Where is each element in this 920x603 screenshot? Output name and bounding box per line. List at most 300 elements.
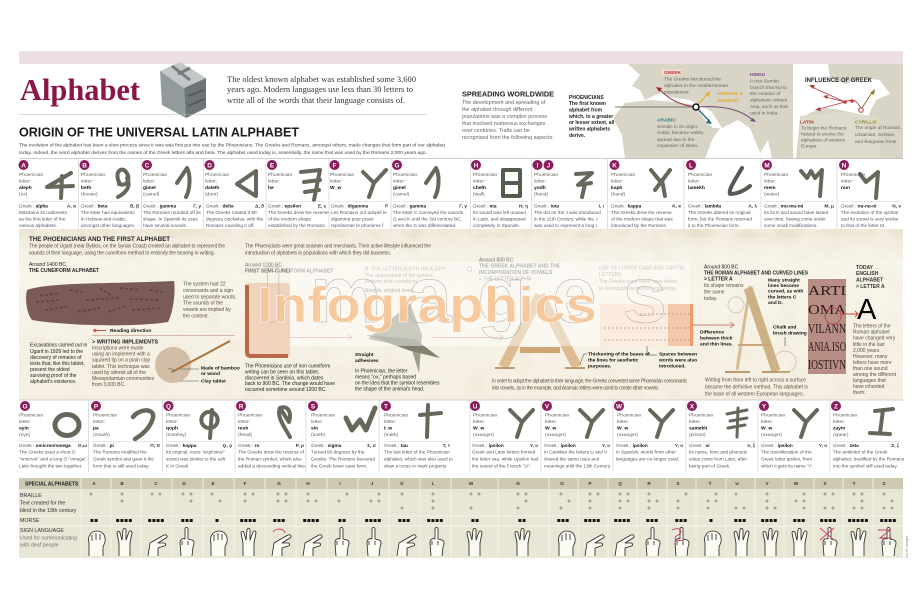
arrows: greek influence <box>809 85 875 112</box>
column letters: Q <box>618 481 622 486</box>
cell: T <box>379 400 453 472</box>
icon: samekh glyph <box>727 408 747 437</box>
text: semi-cuneiform: discovered in Sardinia, which dates <box>245 376 324 382</box>
text: writing implements <box>92 340 158 388</box>
cell: U: Υ, υ <box>530 443 538 449</box>
section: semi-cuneiform alphabet <box>245 262 446 294</box>
intro left: sounds of their language, using the cuneiform method to embody the bearing in writing. <box>29 250 215 256</box>
heading: THE PHOENICIANS AND THE FIRST ALPHABET <box>29 236 170 243</box>
cell: P <box>88 400 160 472</box>
text: sin: Phoenician <box>311 412 335 418</box>
badge C: C <box>145 162 150 169</box>
text: samekh: Phoenician <box>689 412 713 418</box>
cell: X: value come from Latin, after <box>689 456 748 462</box>
callout: spaces: introduced. <box>659 364 686 370</box>
cell: T: Greek : tau <box>384 443 408 448</box>
cell: E: of the modern shape <box>268 216 311 222</box>
cell: C <box>142 159 201 229</box>
text: aleph note: means "ox," perhaps based <box>355 374 416 380</box>
cell: P: Greek symbol and gave it the <box>93 456 154 462</box>
badge K: K <box>612 162 617 169</box>
header band <box>19 51 903 64</box>
cell: X: Greek : xi <box>689 443 710 448</box>
cell: X: being part of Greek. <box>689 464 730 468</box>
icon: ayin glyph <box>55 414 79 436</box>
badge R: R <box>239 403 244 410</box>
column letters: H <box>306 481 310 486</box>
section: roman alphabet heading: > LETTER A <box>704 276 733 282</box>
image: roman inscription: OMA <box>808 302 846 317</box>
cell: E: Ε, ε <box>318 204 327 210</box>
text: gimel: gimel <box>393 185 406 191</box>
cell: L: The Greeks altered its original <box>688 210 751 215</box>
label: greek <box>662 69 728 96</box>
badge T: T <box>384 403 388 410</box>
cell: Z <box>830 400 905 472</box>
text: samekh: samekh <box>689 426 707 432</box>
cell: S: Greek : sigma <box>311 443 341 448</box>
text: waw: letter: <box>761 419 773 425</box>
callout: thick and thin: and thin lines. <box>700 342 734 348</box>
label: cyrillic <box>855 120 902 145</box>
image: roman inscription <box>808 279 847 374</box>
text: kaph: letter: <box>611 178 623 184</box>
cell: E <box>266 159 329 229</box>
cell: U: Greek : ipsilon <box>472 443 504 448</box>
section: semi-cuneiform alphabet: Simple, angled lines. <box>365 288 415 294</box>
icon: roman letter A <box>725 286 796 373</box>
icon: nun glyph <box>860 172 878 198</box>
cell: D <box>204 159 264 229</box>
icon: gimel glyph <box>177 168 190 197</box>
text: semi-cuneiform: writing can be seen on this tablet, <box>245 370 319 376</box>
section: today english alphabet: have inherited <box>853 384 885 390</box>
row labels: Used for communicating <box>20 536 77 542</box>
badge B: B <box>82 162 87 169</box>
panel: spreading worldwide <box>462 90 554 141</box>
intro text: years ago. Modern languages use less than 30 letters to <box>227 85 413 94</box>
panel: phoenicians note: or lesser extent, all <box>569 120 615 126</box>
text: he: Phoenician <box>268 172 292 178</box>
arrow: progression three <box>620 322 734 328</box>
section: today english alphabet: ALPHABET <box>856 278 883 284</box>
text: daleth: (door) <box>205 192 218 198</box>
icon: kaph glyph <box>651 170 670 196</box>
cell: H: completely in Spanish. <box>473 223 520 228</box>
badge D: D <box>207 162 212 169</box>
text: qoph: qoph <box>166 426 178 432</box>
cell: P: The Romans modified the <box>93 450 147 454</box>
cell: S: Greeks. The Romans favoured <box>311 456 375 462</box>
cell: K: introduced by the Romans. <box>611 223 667 228</box>
text: waw: letter: <box>545 419 557 425</box>
text: writing implements: > WRITING IMPLEMENTS <box>92 340 158 346</box>
label: greek: alphabet to the mediterranean <box>664 83 728 89</box>
text: mem: mem <box>764 186 776 191</box>
label: arabic: ARABIC <box>657 118 676 124</box>
badge H: H <box>474 162 479 169</box>
icon: metal type cube <box>160 62 206 118</box>
section: semi-cuneiform alphabet: B. THE LETTER ALEPH OR ALEPH <box>365 266 446 272</box>
column letters: W <box>794 481 799 486</box>
cell: N: Greek : nu-nu-ni <box>841 204 876 208</box>
callout: thick and thin: between thick <box>700 336 733 342</box>
text: qoph: letter: <box>166 419 178 425</box>
cell: K: The Greeks drew the reverse <box>611 210 672 215</box>
cell: O: The Greeks used a short O <box>19 450 76 454</box>
icon: waw glyph <box>510 410 533 437</box>
cell: Y: which it gets its name 'Y'. <box>761 464 813 468</box>
row labels: SPECIAL ALPHABETS <box>25 482 79 488</box>
cell: N: to that of the letter M. <box>841 223 885 228</box>
text: excavations: Excavations carried out in <box>30 342 87 348</box>
text: beth: (house) <box>81 192 98 198</box>
label: cyrillic: and Bulgarian fonts. <box>855 139 898 145</box>
section: today english alphabet: than one sound <box>853 366 888 372</box>
text: gimel: (camel) <box>143 192 160 198</box>
text: ayin: (eye) <box>19 432 31 438</box>
callout: curved lines: lines become <box>768 283 799 289</box>
row labels: with deaf people <box>20 542 59 548</box>
cell: V: shared the same uses and <box>544 456 600 462</box>
text: excavations: present the oldest <box>30 367 70 373</box>
text: excavations: discovery of remains of <box>30 355 82 361</box>
badge N: N <box>842 162 847 169</box>
section: today english alphabet <box>853 265 897 396</box>
column letters: F <box>244 481 247 486</box>
badge V: V <box>545 403 550 410</box>
label: latin: To begin the Romans <box>801 126 847 132</box>
text: ayin: Phoenician <box>19 412 43 418</box>
text: waw: W_w <box>617 426 628 432</box>
text: ayin: letter: <box>19 419 31 425</box>
text: aleph: (ox) <box>19 192 28 198</box>
cell: R <box>235 400 306 472</box>
cell: L <box>684 159 757 229</box>
cell: V <box>541 400 611 472</box>
text: yodh: (hand) <box>534 192 549 198</box>
text: pe: Phoenician <box>93 412 117 418</box>
icon: zayin glyph <box>870 409 893 434</box>
label: latin: helped to evolve the <box>801 132 844 138</box>
text: resh: (head) <box>238 432 253 438</box>
section: today english alphabet: ENGLISH <box>856 271 879 277</box>
cell: D: Δ, δ <box>255 204 264 210</box>
column letters: J <box>371 481 374 486</box>
column letters: S <box>676 481 680 486</box>
cell: K: of the modern shape that was <box>611 216 673 222</box>
text: zayin: letter: <box>833 419 845 425</box>
sign motion marks <box>273 528 892 541</box>
section: greek alphabet heading: > THE LETTER ALPHA <box>479 276 532 282</box>
cell: Q: Its original, more "explosive" <box>166 450 225 454</box>
badge Q: Q <box>166 403 171 410</box>
panel: phoenicians note: PHOENICIANS <box>569 95 604 101</box>
section: greek alphabet heading: INCORPORATION OF VOWELS <box>479 270 553 276</box>
icon: sin glyph <box>346 408 375 430</box>
section: lower case heading: LETTERS <box>599 272 622 278</box>
text: pe: (mouth) <box>93 432 110 438</box>
intro text: write all of the words that their language consists of. <box>227 96 405 105</box>
badge F: F <box>333 162 337 169</box>
image: cuneiform tablet <box>26 281 175 325</box>
cell: I J: was used to represent a long I. <box>534 223 598 228</box>
text: beth: Phoenician <box>81 172 105 178</box>
text: samekh: letter: <box>689 419 701 425</box>
section: roman alphabet heading <box>704 264 809 302</box>
section: today english alphabet: have changed very <box>853 336 896 342</box>
cell: C: shape. In Spanish its uses <box>143 216 198 222</box>
text: qoph: (monkey) <box>166 432 187 438</box>
badge U: U <box>473 403 478 410</box>
callout: thickening: Thickening of the bases of <box>588 352 650 358</box>
cell: K: Κ, κ <box>672 204 681 210</box>
cell: Z: into the symbol still used today. <box>833 464 898 468</box>
text: aleph: letter: <box>19 178 31 184</box>
section: semi-cuneiform alphabet: evolved from cuneiform. <box>365 279 418 285</box>
icon: clay tablet and stylus <box>155 341 230 383</box>
panel: phoenicians note: written alphabets <box>568 126 610 132</box>
text: taw: (mark) <box>384 432 398 438</box>
cell: D: Greek : delta <box>206 204 234 208</box>
heading: origin of the universal latin alphabet: ORIGIN OF THE UNIVERSAL LATIN ALPHABET <box>19 124 299 140</box>
callout: chalk and brush: brush drawing <box>773 330 807 336</box>
section: today english alphabet: TODAY <box>856 265 874 271</box>
arrow: to english A <box>842 311 858 317</box>
credit: Sol 90 Images <box>905 535 909 558</box>
icon: waw glyph <box>650 410 673 437</box>
column letters: G <box>277 481 281 486</box>
text: he: he <box>268 185 274 191</box>
section: greek alphabet heading <box>468 258 561 282</box>
column letters: D <box>182 481 186 486</box>
cell: W: In Spanish, words from other <box>616 450 676 454</box>
text: waw: Phoenician <box>617 412 641 418</box>
label: cyrillic: The origin of Russian, <box>855 125 902 131</box>
cell: U <box>470 400 539 472</box>
text: writing implements: used by almost all of the <box>92 370 146 376</box>
section: semi-cuneiform alphabet: The appearance of the symbol <box>365 273 433 279</box>
label: hindu <box>750 72 789 116</box>
badge L: L <box>689 162 693 169</box>
callout: chalk and brush <box>773 324 807 346</box>
cell: D: The Greeks rotated it 90 <box>206 210 257 215</box>
text: system note: The system had 22 <box>183 282 226 288</box>
cuneiform heading: Around 1400 BC, <box>29 262 67 268</box>
text: excavations: texts that, like this tablet, <box>30 361 85 367</box>
label: latin: alphabets of western <box>801 138 846 144</box>
text: writing implements: Inscriptions were made <box>92 346 144 352</box>
text: excavations: surviving proof of the <box>30 373 77 379</box>
panel: phoenicians and the first alphabet background <box>19 229 903 400</box>
text: waw: letter: <box>617 419 629 425</box>
text: aleph note: In Phoenician, the letter <box>355 368 408 374</box>
cell: E: Greek : epsilon <box>268 204 301 208</box>
section: roman alphabet heading: Around 800 BC <box>704 264 739 270</box>
cell: I J <box>532 159 605 229</box>
cell: H <box>470 159 528 229</box>
label: hindu: Asia, such as that <box>750 104 789 110</box>
text: sin: letter: <box>311 419 323 425</box>
badge E: E <box>270 162 275 169</box>
column letters: N <box>516 481 520 486</box>
cell: T: draw a cross or mark property. <box>384 464 447 468</box>
cell: W: Υ, υ <box>675 443 683 449</box>
text: waw: letter: <box>330 178 342 184</box>
text: waw: letter: <box>473 419 485 425</box>
cell: L: Greek : lambda <box>688 204 721 208</box>
intro right: The Phoenicians were great seamen and merchants. Their active lifestyle influenced the <box>245 244 431 250</box>
label: hebrew and aramaic: HEBREW & <box>717 91 744 97</box>
text: cheth: letter: <box>473 178 485 184</box>
text: writing implements: squared tip on a plain clay <box>92 358 151 364</box>
text: gimel: letter: <box>143 178 155 184</box>
label: latin: Europe. <box>801 144 818 150</box>
section: greek alphabet heading: THE GREEK ALPHABET AND THE <box>479 264 561 270</box>
panel: spreading worldwide: that involved numerous exchanges <box>462 121 546 127</box>
cell: Y <box>758 400 827 472</box>
arrow: reading direction <box>93 328 151 334</box>
text: sin: (tooth) <box>311 432 326 438</box>
cell: G: G and K until the 3rd century BC, <box>393 216 462 222</box>
cell: K <box>608 159 681 229</box>
text: roman note: the base of all western European languages. <box>705 392 804 398</box>
section: lower case heading: USE OF LOWER CASE AND CAPITAL <box>599 266 686 272</box>
badge J: J <box>547 162 551 169</box>
callout: curved lines: the letters C <box>768 294 797 300</box>
text: waw: (oxanger) <box>617 432 638 438</box>
column letters: E <box>211 481 215 486</box>
section: today english alphabet: languages that <box>853 378 886 384</box>
cell: P: form that is still used today. <box>93 464 149 468</box>
cell: B: The letter has equivalents <box>81 210 135 215</box>
icon: he glyph <box>301 170 320 200</box>
cell: P: Greek : pi <box>93 443 114 448</box>
icon: cheth glyph <box>503 170 520 196</box>
callout: spaces: Spaces between <box>659 352 697 358</box>
text: kaph: kaph <box>611 185 622 191</box>
cell: B: in Hebrew and Arabic, <box>81 216 127 222</box>
column letters: C <box>154 481 158 486</box>
cell: Z: alphabet, modified by the Romans <box>833 456 905 462</box>
cell: W: Greek : ipsilon <box>616 443 648 448</box>
label: hindu: HINDU <box>750 72 766 78</box>
labels: stylus and tablet: Clay tablet <box>201 378 226 384</box>
cell: N: and its sound is very similar <box>841 216 899 222</box>
intro text: The oldest known alphabet was established some 3,600 <box>227 75 416 84</box>
cell: L: Λ, λ <box>748 204 757 210</box>
callout: spaces <box>647 346 697 370</box>
section: today english alphabet: them. <box>853 390 866 396</box>
image: roman inscription: ARTI <box>808 283 847 298</box>
text: nun: letter: <box>841 178 853 184</box>
cell: F <box>329 159 388 229</box>
callout: thickening: purposes. <box>588 364 612 370</box>
label: hindu: used in India. <box>750 110 779 116</box>
text: beth: letter: <box>81 178 93 184</box>
cell: S: the Greek lower case form. <box>311 464 367 468</box>
text: zayin: zayin <box>833 426 845 432</box>
cell: I J: Ι, ι <box>599 204 605 210</box>
text: system note: The sounds of the <box>183 300 223 306</box>
text: mem: (water) <box>764 192 780 198</box>
text: aleph note: on the idea that the symbol resembles <box>355 380 440 386</box>
section: today english alphabet: 2,000 years. <box>853 348 881 354</box>
cell: V: meanings until the 13th Century. <box>544 464 611 468</box>
intro right: introduction of alphabets in populations with which they did business. <box>245 250 391 256</box>
image: roman inscription: VILANN <box>808 321 846 336</box>
panel: spreading worldwide: recognised from the following aspects: <box>462 135 554 141</box>
morse row <box>90 519 896 522</box>
label: arabic: expansion of Islam. <box>657 143 698 149</box>
letter row 2 <box>19 400 905 472</box>
column letters: U <box>735 481 739 486</box>
icon: beth glyph <box>117 170 129 197</box>
column letters: Y <box>852 481 856 486</box>
column letters: I <box>339 481 341 486</box>
badge Y: Y <box>762 403 767 410</box>
callout: spaces: words were also <box>658 358 697 364</box>
section: roman alphabet heading: Its shape remains <box>704 283 744 289</box>
text: aleph note <box>355 352 440 392</box>
icon: aleph sketch <box>366 303 440 373</box>
text: pe: pe <box>93 426 99 432</box>
text: zayin: (spear) <box>833 432 849 438</box>
section: today english alphabet: among the different <box>853 372 897 378</box>
origin intro text: The evolution of the alphabet has been a slow process since it was was first put into use by the Phoenicians. The Greeks and Romans, amongst others, made changes that form part of our alphabet <box>19 142 446 148</box>
cell: U: Greek and Latin letters formed <box>472 450 536 454</box>
column letters: Z <box>883 481 886 486</box>
cell: N: The evolution of the symbol <box>841 210 898 215</box>
cell: O: Latin brought the two together. <box>19 464 82 468</box>
badge M: M <box>764 162 770 169</box>
text: yodh: letter: <box>534 178 546 184</box>
text: qoph: Phoenician <box>166 412 190 418</box>
row labels: blind in the 19th century <box>20 508 77 514</box>
cell: U: the letter vau, while Upsilon had <box>472 456 539 462</box>
cell: S <box>306 400 377 472</box>
section: lower case heading: to distinguish sentence beginnings. <box>599 286 677 292</box>
text: waw: W_w <box>545 426 556 432</box>
text: taw: Phoenician <box>384 412 408 418</box>
text: aleph note: adhesives <box>355 358 379 364</box>
column letters: X <box>823 481 827 486</box>
text: excavations: Ugarit in 1929 led to the <box>30 349 83 355</box>
callout: curved lines: and D. <box>768 300 784 306</box>
text: semi-cuneiform: back to 900 BC. The change would have <box>245 381 335 387</box>
cell: G: Γ, γ <box>459 204 467 210</box>
section: roman alphabet heading: today. <box>704 296 717 302</box>
label: hindu: alphabetic writers <box>750 98 788 104</box>
text: waw: (oxanger) <box>473 432 494 438</box>
text: pe: letter: <box>93 419 105 425</box>
labels: stylus and tablet: or wood <box>201 371 220 377</box>
section: phoenicians and the first alphabet text <box>29 236 431 274</box>
icon: waw glyph <box>794 410 817 437</box>
cell: L: form, but the Romans returned <box>688 216 752 222</box>
white wash and watermark: Images <box>262 250 667 339</box>
intro left: The people of Ugarit (near Byblos, on the Syrian Coast) created an alphabet to represent the <box>29 244 225 250</box>
arrow: progression two <box>432 334 503 340</box>
panel: phoenicians note: alphabet from <box>569 108 603 114</box>
text: kaph: Phoenician <box>611 172 635 178</box>
cell: Z: Greek : zeta <box>833 443 859 448</box>
letter row 1 <box>18 159 901 229</box>
row labels: BRAILLE <box>20 493 42 499</box>
label: arabic: Semitic in its origin, <box>657 124 698 130</box>
column letters: B <box>120 481 124 486</box>
section: today english alphabet: However, many <box>853 354 888 360</box>
